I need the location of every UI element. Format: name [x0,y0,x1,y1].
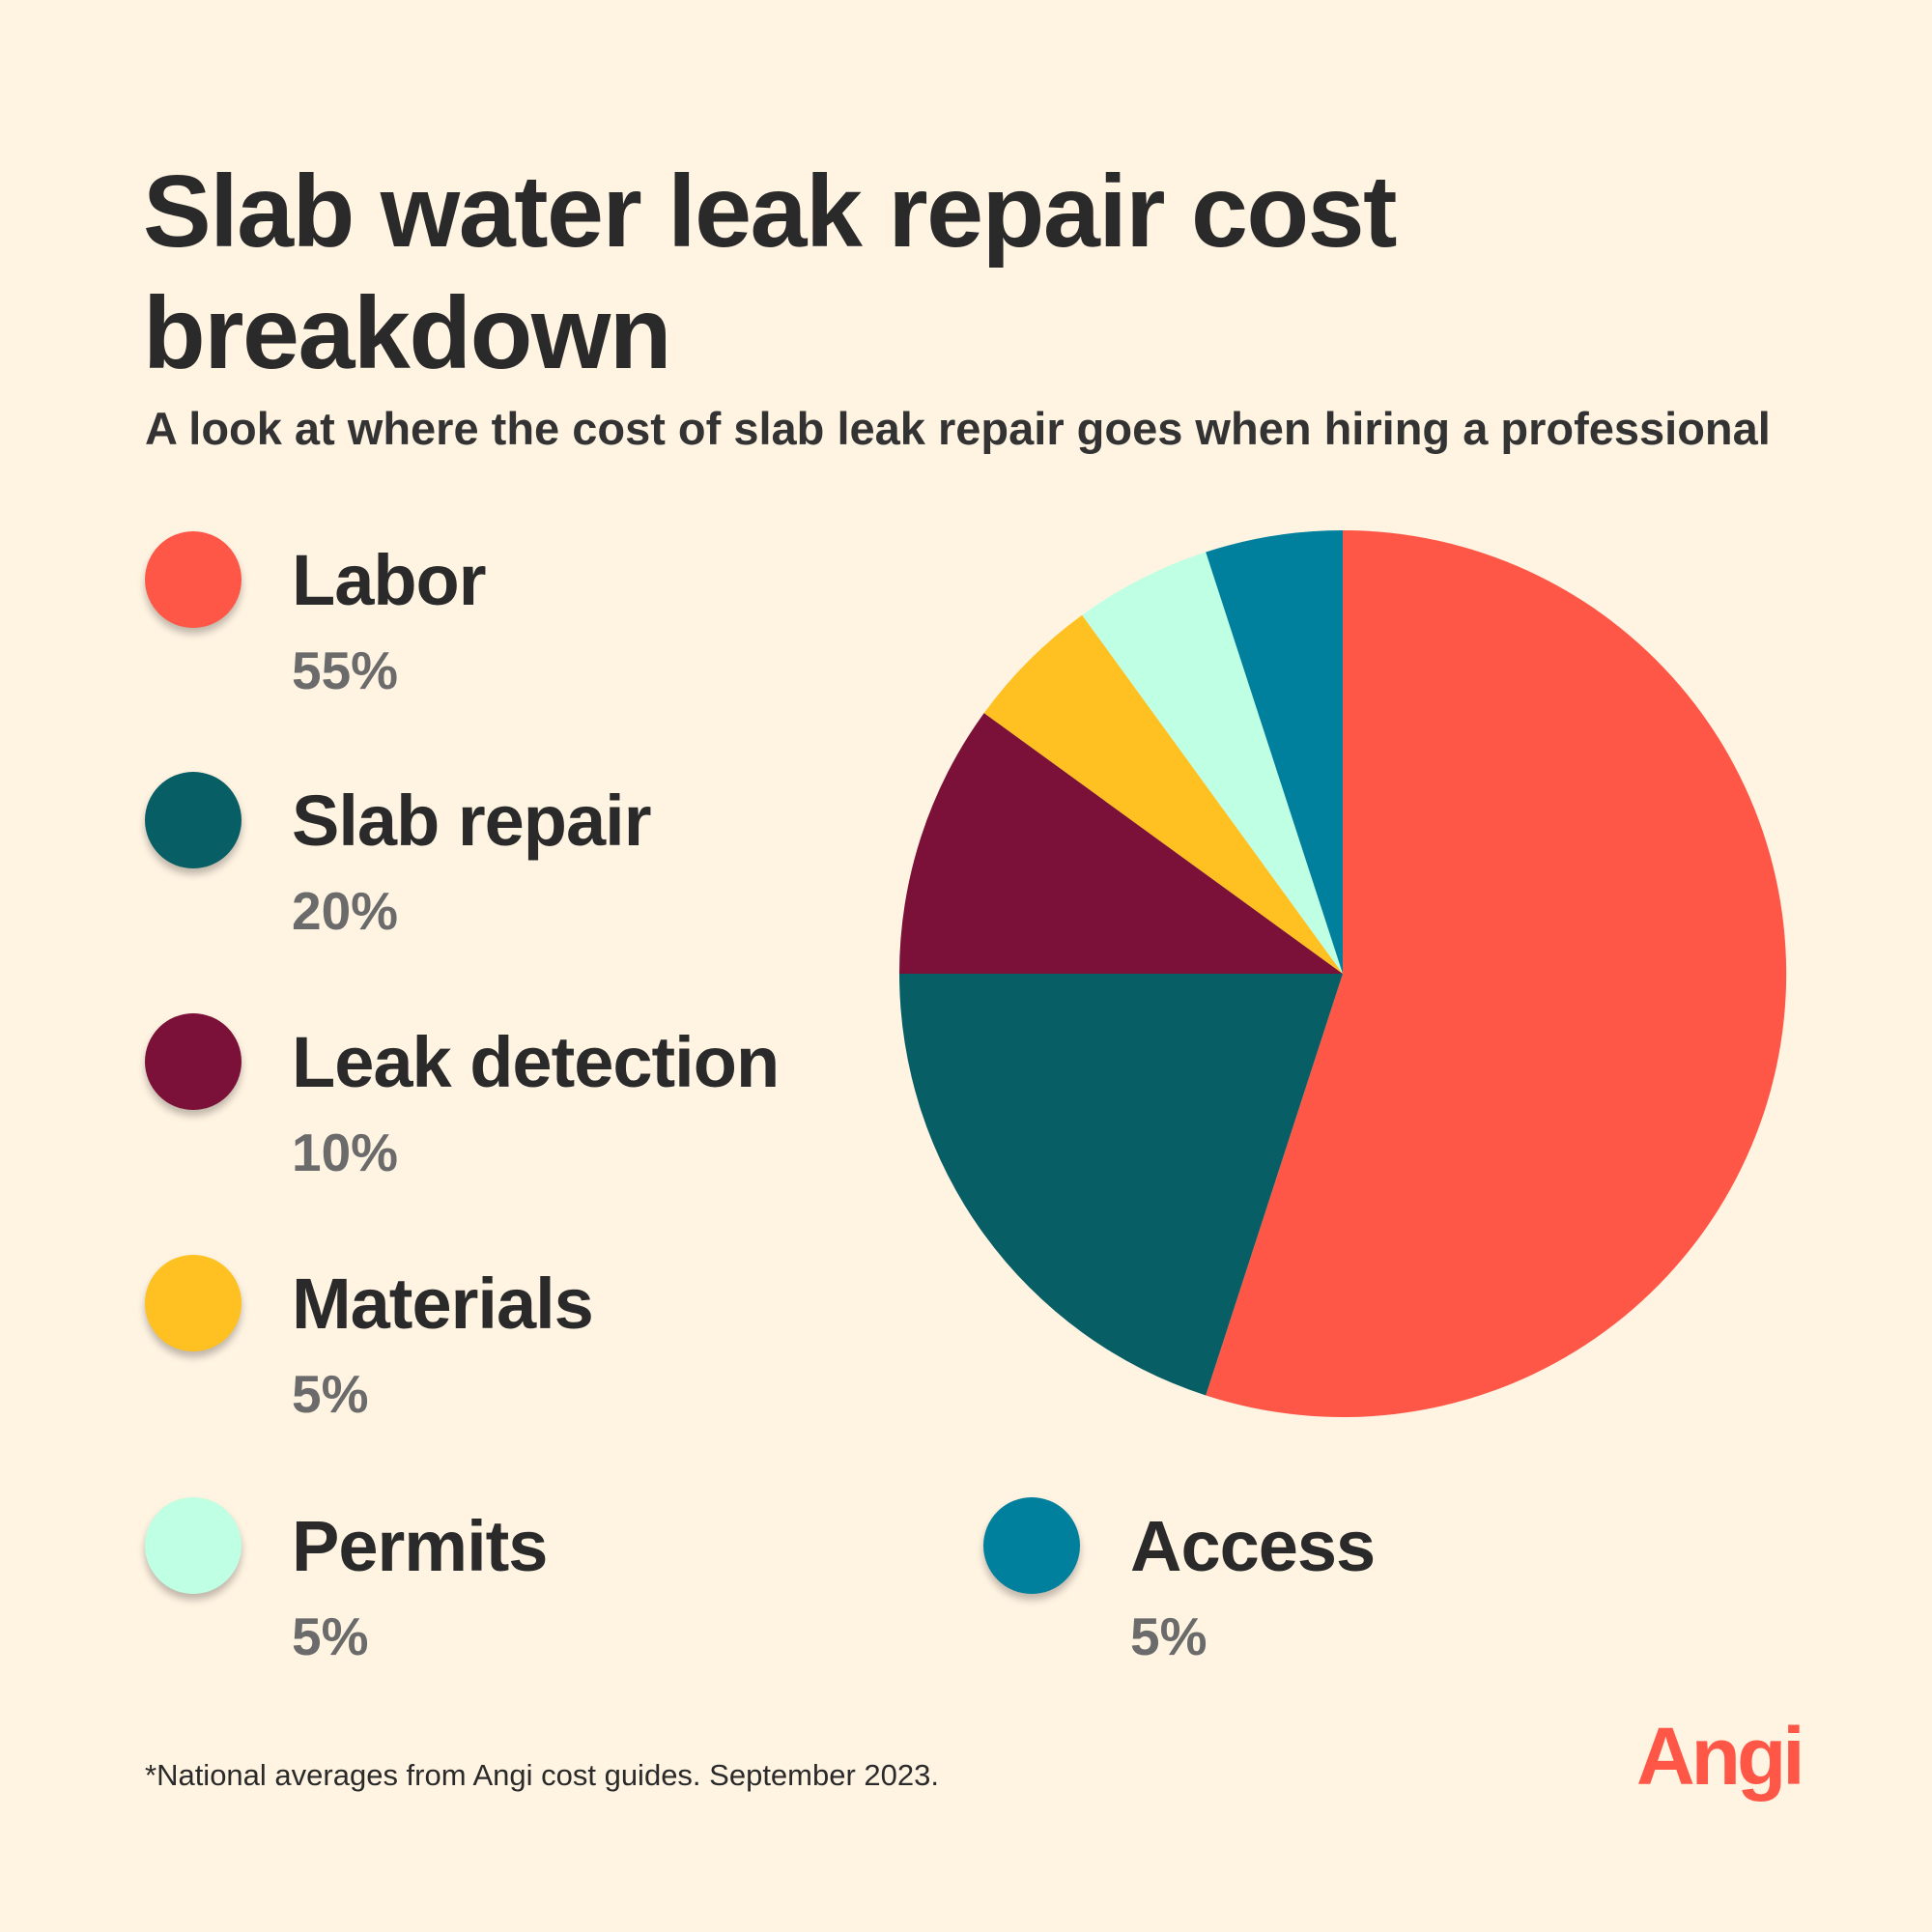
legend: labor: Labor [292,540,486,620]
title [143,155,1397,390]
legend: slab repair: 20% [292,881,398,941]
legend: permits: 5% [292,1606,369,1666]
legend: materials [141,1255,593,1424]
legend: labor: 55% [292,640,398,700]
legend: materials: 5% [292,1364,369,1424]
title: Slab water leak repair cost [143,155,1396,269]
legend: labor [141,531,486,700]
footnote: *National averages from Angi cost guides. September 2023. [145,1758,939,1792]
legend: permits [141,1497,547,1666]
title: breakdown [143,276,670,390]
subtitle: A look at where the cost of slab leak repair goes when hiring a professional [145,403,1771,454]
legend: permits: Permits [292,1506,547,1586]
legend: access [980,1497,1375,1666]
legend: slab repair [141,772,651,941]
legend: access: 5% [1130,1606,1208,1666]
legend: slab repair: Slab repair [292,781,651,861]
logo: Angi: Angi [1636,1711,1802,1802]
legend: leak detection: 10% [292,1122,398,1182]
legend: materials: Materials [292,1264,593,1344]
legend: leak detection: Leak detection [292,1022,779,1102]
legend: access: Access [1130,1506,1375,1586]
legend: leak detection [141,1013,779,1182]
